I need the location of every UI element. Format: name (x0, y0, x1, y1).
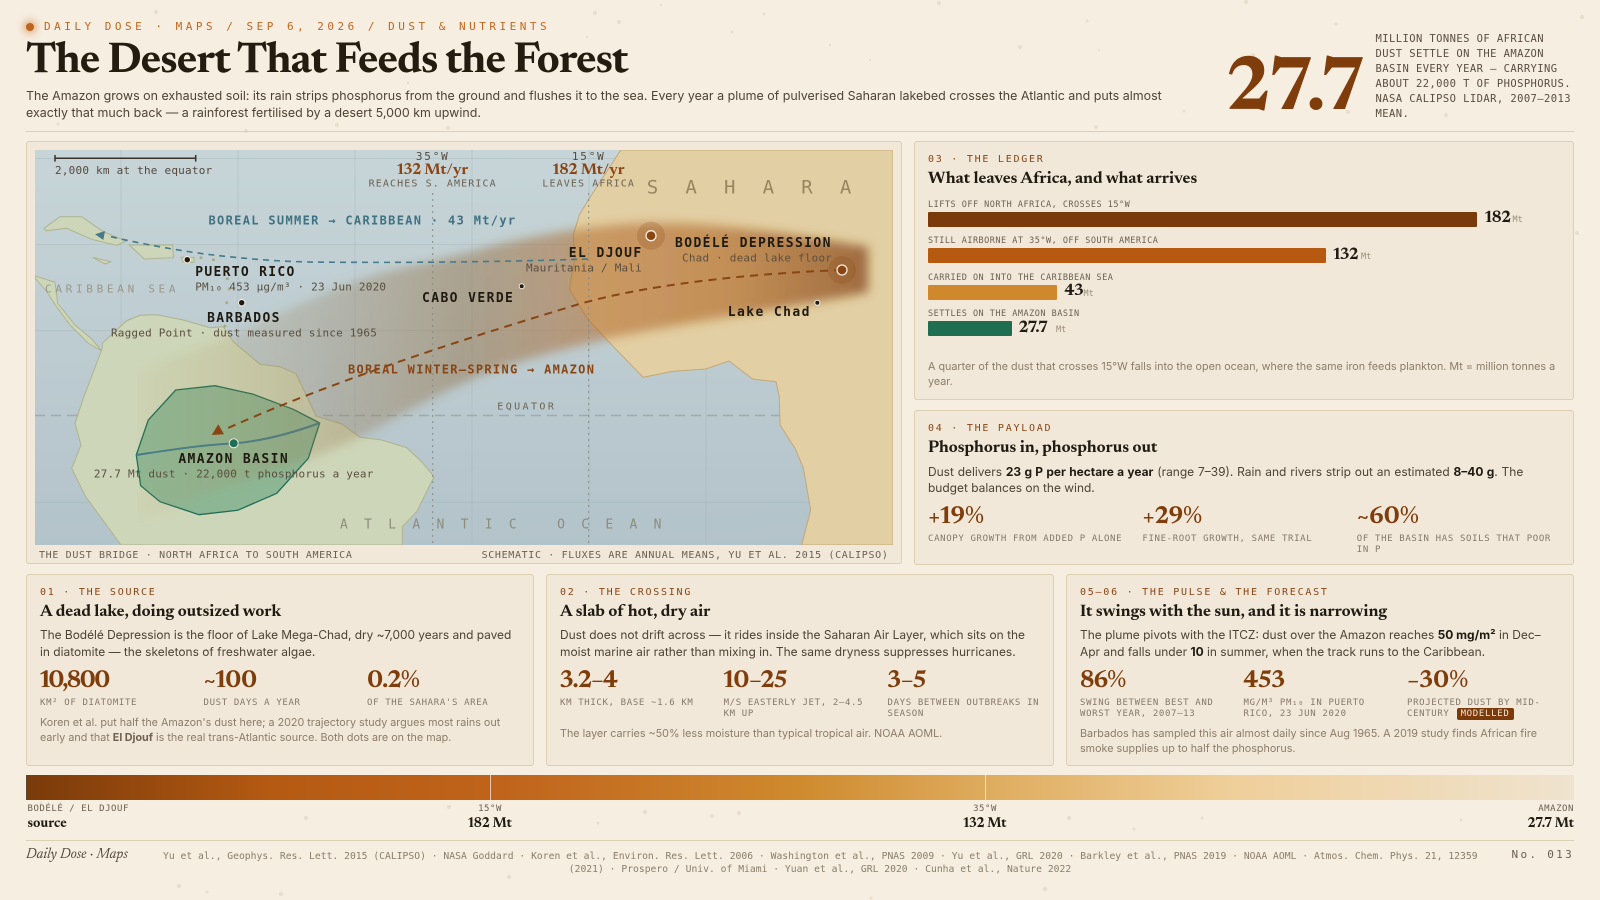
map caption left: THE DUST BRIDGE · NORTH AFRICA TO SOUTH AMERICA (39, 550, 353, 561)
bar row: 43 Mt: 43 (1064, 283, 1083, 300)
Amazon basin marker: 27.7 Mt dust · 22,000 t phosphorus a year (94, 467, 374, 480)
subtitle: exactly that much back — a rainforest fertilised by a desert 5,000 km upwind. (26, 106, 481, 120)
Puerto Rico marker: PM₁₀ 453 µg/m³ · 23 Jun 2020 (195, 280, 386, 293)
heading: A dead lake, doing outsized work (40, 604, 281, 621)
bar row: 132 Mt: STILL AIRBORNE AT 35°W, OFF SOUTH AMERICA (928, 236, 1158, 246)
map caption right: SCHEMATIC · FLUXES ARE ANNUAL MEANS, YU ET AL. 2015 (CALIPSO) (482, 550, 888, 561)
bar stop: source: BODÉLÉ / EL DJOUF (28, 804, 129, 814)
El Djouf marker: Mauritania / Mali (526, 261, 642, 274)
body text: in diatomite — the skeletons of freshwater algae. (40, 644, 315, 659)
Amazon basin marker (94, 439, 374, 480)
header eyebrow (19, 16, 550, 38)
body text: The plume pivots with the ITCZ: dust over the Amazon reaches 50 mg/m² in Dec– (1080, 627, 1541, 642)
footer issue number: No. 013 (1512, 848, 1574, 861)
heading: Phosphorus in, phosphorus out (928, 440, 1157, 457)
footnote (1080, 727, 1537, 755)
bar row: 132 Mt: Mt (1361, 252, 1371, 262)
15W flux label: LEAVES AFRICA (542, 178, 635, 189)
panel: the crossing: SEASON (888, 708, 924, 718)
body text: The Bodélé Depression is the floor of Lake Mega-Chad, dry ~7,000 years and paved (40, 627, 511, 642)
35W flux label: 132 Mt/yr (397, 163, 468, 179)
panel: the crossing (546, 574, 1054, 766)
summer route to the Caribbean (95, 231, 588, 262)
body text (560, 627, 1025, 659)
section tag: 05–06 · THE PULSE & THE FORECAST (1080, 587, 1329, 598)
Bodele marker (675, 235, 856, 284)
Lake Chad marker: Lake Chad (728, 305, 811, 320)
hero caption (1376, 32, 1571, 120)
hero caption: NASA CALIPSO LIDAR, 2007–2013 (1376, 92, 1571, 104)
body text (1080, 627, 1541, 659)
panel: the pulse and the forecast: RICO, 23 JUN 2020 (1244, 708, 1347, 718)
title: The Desert That Feeds the Forest (26, 40, 628, 84)
35W flux label: 35°W (416, 150, 450, 163)
panel: the payload: CANOPY GROWTH FROM ADDED P ALONE (928, 534, 1122, 544)
panel: the pulse and the forecast: MG/M³ PM₁₀ IN PUERTO (1244, 698, 1365, 708)
Cabo Verde marker: CABO VERDE (422, 291, 514, 306)
bar row: 132 Mt: 132 (1333, 246, 1358, 264)
hero caption: MEAN. (1376, 108, 1409, 120)
Barbados marker (111, 300, 377, 339)
bar stop: 35W: 35°W (973, 804, 997, 814)
panel: the ledger (914, 141, 1574, 400)
hero caption: BASIN EVERY YEAR — CARRYING (1376, 62, 1558, 74)
bar row: 27.7 Mt: Mt (1056, 325, 1066, 335)
body text: Dust does not drift across — it rides inside the Saharan Air Layer, which sits on the (560, 627, 1025, 642)
stat: diatomite: 10,800 (40, 669, 109, 694)
Amazon basin (136, 386, 320, 515)
footer sources: Yu et al., Geophys. Res. Lett. 2015 (CALIPSO) · NASA Goddard · Koren et al., Environ. Res. Lett. 2006 · Washington et al., PNAS 2009 · Yu et al., GRL 2020 · Barkley et al., PNAS 2019 · NOAA AOML · Atmos. Chem. Phys. 21, 12359 (163, 850, 1478, 862)
panel: the payload: FINE-ROOT GROWTH, SAME TRIAL (1142, 534, 1312, 544)
panel: the crossing: KM THICK, BASE ~1.6 KM (560, 698, 694, 708)
hero caption: DUST SETTLE ON THE AMAZON (1376, 48, 1544, 60)
bar row: 27.7 Mt: SETTLES ON THE AMAZON BASIN (928, 308, 1080, 318)
Barbados marker: Ragged Point · dust measured since 1965 (111, 326, 377, 339)
stat: easterly jet: 10–25 (724, 669, 787, 694)
bar stop: Amazon (1528, 804, 1574, 831)
bar stop: Amazon: 27.7 Mt (1528, 817, 1574, 831)
Puerto Rico marker (184, 256, 386, 293)
bar stop: 15W: 182 Mt (468, 817, 512, 831)
panel: the payload: OF THE BASIN HAS SOILS THAT POOR (1357, 534, 1551, 544)
bar row: 182 Mt: Mt (1512, 215, 1523, 225)
footnote: The layer carries ~50% less moisture than typical tropical air. NOAA AOML. (560, 727, 942, 740)
Lake Chad marker (728, 300, 820, 320)
footer sources (163, 850, 1478, 874)
panel: the crossing: KM UP (724, 708, 754, 718)
footnote: Barbados has sampled this air almost daily since Aug 1965. A 2019 study finds African fire (1080, 727, 1537, 740)
panel: map (26, 141, 902, 564)
bar stop: source: source (28, 817, 67, 831)
bar row: 27.7 Mt: 27.7 (1019, 320, 1047, 336)
35W flux label: REACHES S. AMERICA (369, 178, 497, 189)
scale bar (55, 155, 213, 177)
Cabo Verde marker (422, 284, 524, 306)
footnote: smoke supplies up to half the phosphorus. (1080, 742, 1295, 755)
land: Central America and Caribbean islands (35, 217, 231, 351)
panel: the pulse and the forecast: PROJECTED DUST BY MID- (1407, 698, 1541, 708)
bar stop: Amazon: AMAZON (1538, 804, 1574, 814)
El Djouf marker: EL DJOUF (569, 246, 643, 261)
bar row: 182 Mt: 182 (1485, 210, 1511, 226)
Barbados marker: BARBADOS (207, 311, 281, 326)
hero caption: ABOUT 22,000 T OF PHOSPHORUS. (1376, 78, 1571, 90)
winter route to the Amazon (212, 270, 842, 435)
region label: Sahara: SAHARA (647, 176, 879, 198)
panel: the source (26, 574, 534, 766)
body text: moist marine air rather than mixing in. The same dryness suppresses hurricanes. (560, 644, 1016, 659)
footnote (928, 360, 1555, 388)
panel: the source: KM² OF DIATOMITE (40, 698, 137, 708)
gradient attenuation bar (26, 775, 1574, 800)
stat: projected dust: −30% (1407, 669, 1468, 694)
stat: layer thickness: 3.2–4 (560, 669, 617, 694)
heading: What leaves Africa, and what arrives (928, 170, 1197, 188)
subtitle: The Amazon grows on exhausted soil: its rain strips phosphorus from the ground and flushes it to the sea. Every year a plume of pulverised Saharan lakebed crosses the Atlantic and puts almost (26, 88, 1162, 104)
footnote: Koren et al. put half the Amazon's dust here; a 2020 trajectory study argues most rains out (40, 716, 500, 728)
scale bar: 2,000 km at the equator (55, 164, 213, 177)
land: Africa (569, 150, 893, 545)
panel: the source: OF THE SAHARA'S AREA (367, 698, 488, 708)
body text: Dust delivers 23 g P per hectare a year (range 7–39). Rain and rivers strip out an estimated 8–40 g. The (928, 464, 1523, 479)
body text: Apr and falls under 10 in summer, when the track runs to the Caribbean. (1080, 644, 1485, 659)
region label: Caribbean Sea: CARIBBEAN SEA (45, 282, 179, 295)
route label: summer: BOREAL SUMMER → CARIBBEAN · 43 Mt/yr (208, 213, 516, 227)
heading: It swings with the sun, and it is narrowing (1080, 604, 1387, 621)
equator label: EQUATOR (497, 402, 556, 413)
bar row: 182 Mt: LIFTS OFF NORTH AFRICA, CROSSES 15°W (928, 200, 1130, 210)
panel: the source: DUST DAYS A YEAR (204, 698, 301, 708)
El Djouf marker (526, 222, 665, 274)
Bodele marker: Chad · dead lake floor (682, 251, 832, 264)
panel: the pulse and the forecast: SWING BETWEEN BEST AND (1080, 698, 1214, 708)
stat: days between outbreaks: 3–5 (888, 669, 926, 694)
bar stop: 35W (963, 804, 1007, 831)
land: South America (72, 315, 434, 545)
15W flux label: 182 Mt/yr (553, 163, 625, 179)
subtitle (26, 88, 1162, 120)
hero caption: MILLION TONNES OF AFRICAN (1376, 32, 1544, 44)
panel: the payload: IN P (1357, 544, 1381, 554)
panel: the pulse and the forecast (1066, 574, 1574, 766)
bar row: 43 Mt (928, 272, 1113, 300)
stat: poor soils: ~60% (1357, 505, 1419, 530)
Bodele marker: BODÉLÉ DEPRESSION (675, 235, 832, 251)
stat: fine-root growth: +29% (1142, 505, 1202, 530)
bar stop: 35W: 132 Mt (963, 817, 1007, 831)
body text (928, 464, 1523, 495)
body text (40, 627, 511, 659)
stat: swing: 86% (1080, 669, 1125, 694)
panel: the crossing: M/S EASTERLY JET, 2–4.5 (724, 698, 863, 708)
bar stop: 15W: 15°W (478, 804, 502, 814)
hero number: 27.7 (1227, 53, 1364, 130)
bar row: 182 Mt (928, 200, 1523, 227)
bar row: 43 Mt: Mt (1084, 289, 1094, 299)
section tag: 01 · THE SOURCE (40, 587, 157, 598)
panel: the pulse and the forecast: WORST YEAR, 2007–13 (1080, 708, 1195, 718)
bar row: 43 Mt: CARRIED ON INTO THE CARIBBEAN SEA (928, 272, 1113, 282)
route label: winter: BOREAL WINTER–SPRING → AMAZON (348, 362, 595, 376)
bar row: 27.7 Mt (928, 308, 1080, 336)
15W flux label: 15°W (572, 150, 606, 163)
footnote: year. (928, 375, 953, 388)
stat: share of Sahara: 0.2% (367, 669, 419, 694)
heading: A slab of hot, dry air (560, 604, 710, 621)
bar row: 132 Mt (928, 236, 1371, 264)
dust plume (137, 223, 868, 520)
footnote: A quarter of the dust that crosses 15°W falls into the open ocean, where the same iron feeds plankton. Mt = million tonnes a (928, 360, 1555, 373)
bar stop: 15W (468, 804, 512, 831)
Amazon basin marker: AMAZON BASIN (178, 452, 289, 467)
footer brand: Daily Dose · Maps (26, 847, 128, 862)
footnote: early and that El Djouf is the real trans-Atlantic source. Both dots are on the map. (40, 730, 451, 744)
panel: the crossing: DAYS BETWEEN OUTBREAKS IN (888, 698, 1039, 708)
section tag: 04 · THE PAYLOAD (928, 423, 1052, 434)
15W flux label (542, 150, 635, 189)
footnote (40, 716, 500, 744)
stat: canopy growth: +19% (928, 505, 984, 530)
region label: Atlantic Ocean: ATLANTIC OCEAN (340, 517, 678, 532)
stat: dust days: ~100 (204, 669, 257, 694)
Puerto Rico marker: PUERTO RICO (195, 265, 296, 280)
body text: budget balances on the wind. (928, 480, 1095, 495)
map of the dust bridge (35, 150, 893, 545)
section tag: 03 · THE LEDGER (928, 154, 1045, 164)
bar stop: source (28, 802, 129, 831)
footer sources: (2021) · Prospero / Univ. of Miami · Yuan et al., GRL 2020 · Cunha et al., Nature 2022 (569, 864, 1071, 874)
panel: the payload (914, 410, 1574, 565)
section tag: 02 · THE CROSSING (560, 587, 692, 598)
header eyebrow: DAILY DOSE · MAPS / SEP 6, 2026 / DUST & NUTRIENTS (44, 20, 550, 33)
panel: the pulse and the forecast: CENTURY MODELLED (1407, 708, 1510, 718)
stat: Puerto Rico peak: 453 (1244, 669, 1285, 694)
35W flux label (369, 150, 497, 189)
